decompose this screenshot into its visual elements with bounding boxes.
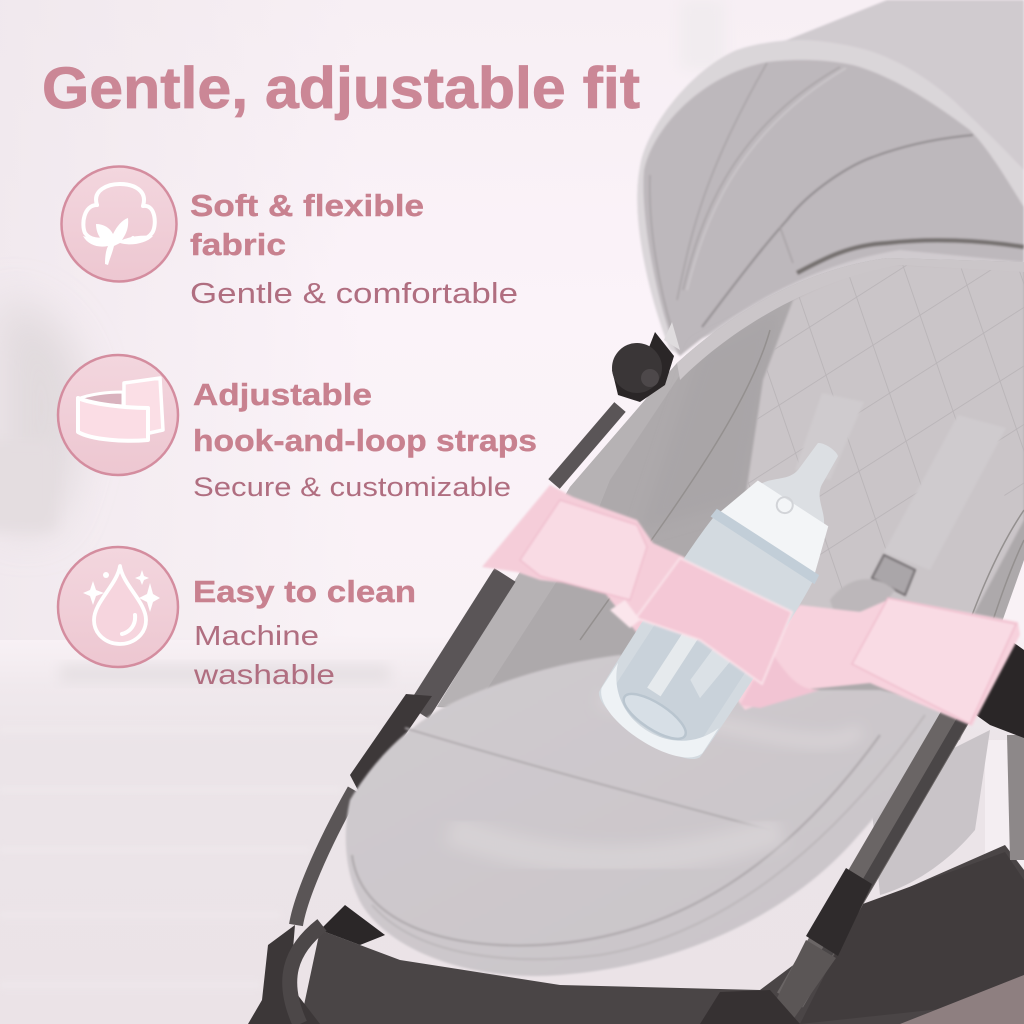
heading line two: fabric	[190, 227, 286, 262]
heading: Adjustable	[193, 377, 372, 412]
heading: Soft & flexible	[190, 188, 424, 223]
description: Gentle & comfortable	[190, 278, 518, 310]
stroller canopy	[637, 0, 1024, 356]
feature: hook-and-loop straps	[58, 355, 537, 502]
pink strap: back sections	[482, 485, 1020, 726]
stroller basket and lower frame	[300, 735, 1024, 1024]
icon: cotton boll	[62, 166, 176, 282]
feature: soft and flexible fabric	[62, 166, 518, 310]
description: Secure & customizable	[193, 472, 511, 502]
left frame tube and joint	[248, 322, 680, 1024]
icon: strap band	[58, 355, 178, 475]
description: Machine	[194, 620, 319, 651]
pink strap: center wrap over bottle	[610, 558, 792, 684]
baby bottle	[588, 413, 882, 773]
description line two: washable	[193, 659, 335, 690]
footmuff seat cover	[346, 655, 945, 976]
icon: water drop with sparkles	[58, 547, 178, 667]
seat back with quilting	[437, 255, 1024, 895]
right frame tube	[700, 640, 1024, 1024]
feature: easy to clean	[58, 547, 416, 690]
heading: Easy to clean	[193, 574, 416, 609]
main title: Gentle, adjustable fit	[42, 56, 640, 121]
shoulder harness straps and buckle	[795, 393, 1006, 615]
heading line two: hook-and-loop straps	[193, 423, 537, 458]
